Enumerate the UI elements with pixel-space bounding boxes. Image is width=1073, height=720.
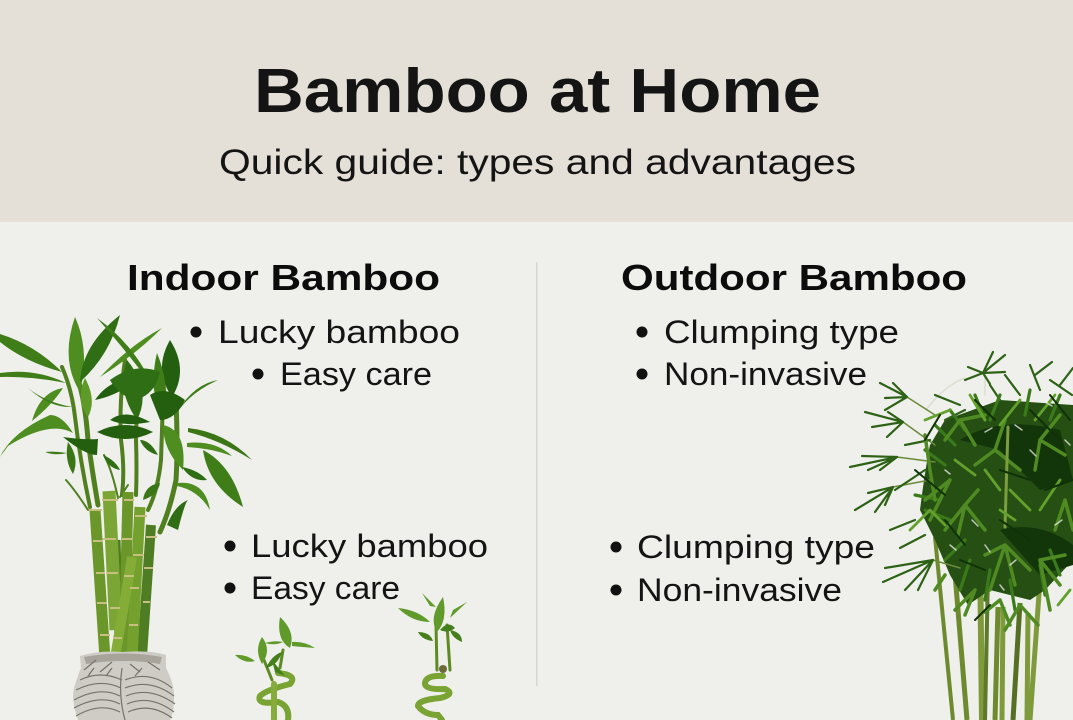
fine outer fronds [850, 352, 1073, 590]
illustration: outdoor bamboo [850, 352, 1073, 720]
illustration: spiral bamboo left [235, 617, 315, 720]
bullet list: outdoor upper: Clumping type [664, 314, 899, 350]
bullet list: outdoor lower: Clumping type [637, 529, 875, 565]
bullet list: outdoor lower: Non-invasive [637, 572, 842, 608]
subtitle: Quick guide: types and advantages [219, 143, 856, 182]
illustration: spiral bamboo right [398, 593, 467, 720]
heading: outdoor bamboo: Outdoor Bamboo [621, 257, 967, 298]
bullet list: indoor lower: Easy care [251, 570, 400, 606]
title: Bamboo at Home [254, 57, 821, 126]
illustration: potted lucky bamboo [0, 315, 252, 720]
bullet list: outdoor upper [636, 314, 899, 392]
bullet list: indoor lower: Lucky bamboo [251, 528, 488, 564]
bullet list: indoor upper [190, 314, 460, 392]
bullet list: indoor lower [224, 528, 488, 606]
icon: ceramic pot [73, 651, 175, 720]
foliage mass [920, 400, 1073, 605]
bullet list: outdoor upper: Non-invasive [664, 356, 867, 392]
bullet list: outdoor lower [610, 529, 875, 608]
bullet list: indoor upper: Easy care [280, 356, 432, 392]
heading: indoor bamboo: Indoor Bamboo [127, 257, 440, 298]
bullet list: indoor upper: Lucky bamboo [218, 314, 460, 350]
